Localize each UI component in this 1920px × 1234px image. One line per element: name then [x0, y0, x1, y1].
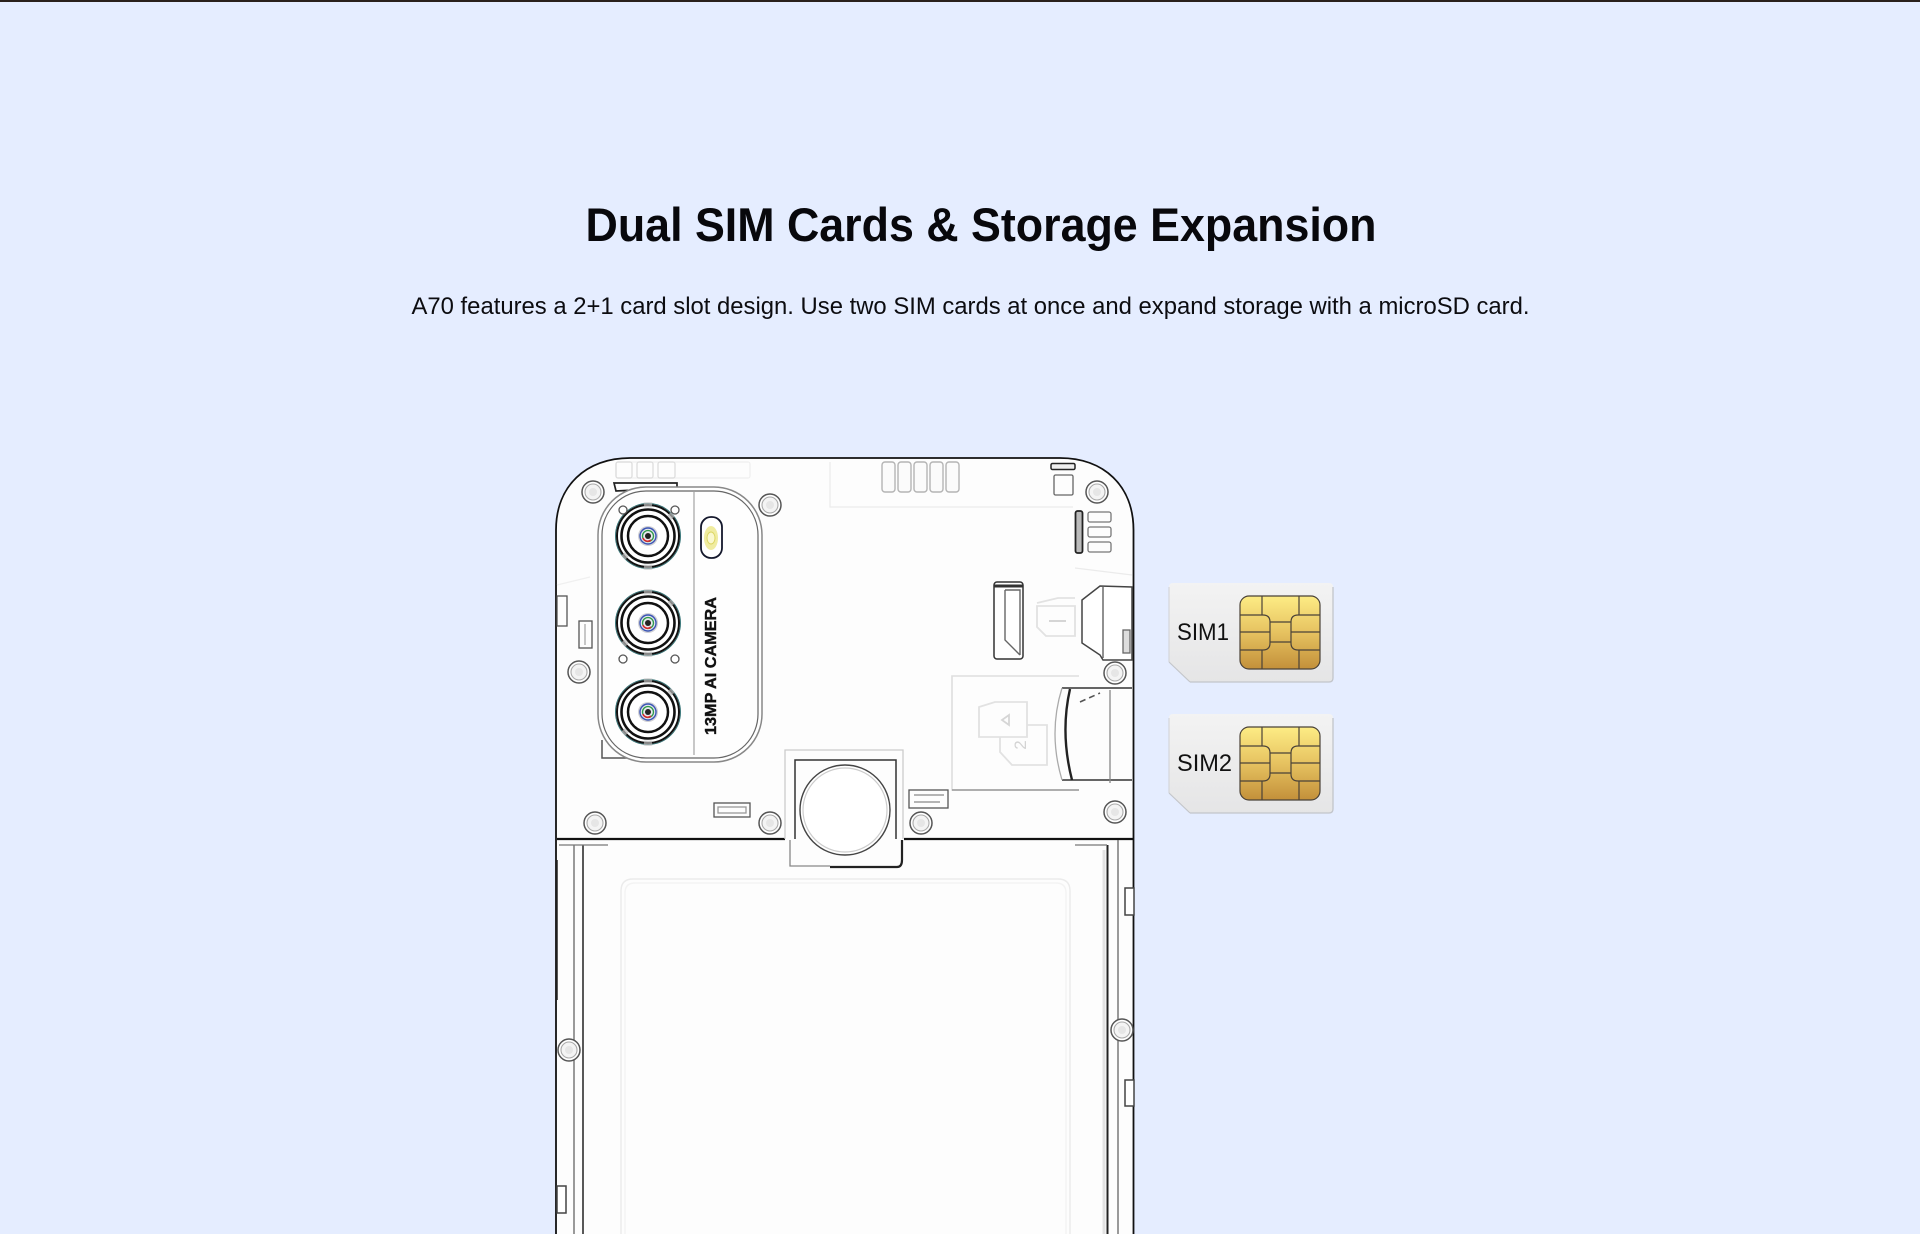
bottom small grille	[714, 803, 750, 817]
SIM1 label: SIM1	[1177, 619, 1229, 646]
side screws on rails	[558, 1019, 1133, 1061]
top vents	[882, 462, 959, 492]
phone body outline	[556, 458, 1134, 1234]
divider line	[557, 838, 1133, 840]
sim 1 tray	[1082, 586, 1132, 660]
screws	[568, 481, 1126, 834]
storage area with icons	[952, 676, 1079, 790]
top faint panel and slots	[557, 462, 1132, 585]
top edge strip	[0, 0, 1920, 2]
side clips	[557, 888, 1134, 1213]
SIM1 card	[1169, 583, 1333, 682]
subtitle: A70 features a 2+1 card slot design. Use two SIM cards at once and expand storage with a microSD card.	[412, 293, 1530, 320]
screw beside sim tray	[1104, 662, 1126, 684]
top right sensor and speaker	[1051, 464, 1111, 553]
SIM2 label: SIM2	[1177, 750, 1232, 777]
camera lens 3	[616, 680, 680, 744]
micro USB style slot	[994, 582, 1023, 659]
dark bar above camera	[614, 483, 677, 491]
side frame rails	[557, 840, 1118, 1234]
camera module	[598, 487, 762, 762]
SIM2 chip	[1240, 727, 1320, 800]
camera lens 1	[616, 504, 680, 568]
sim 2 tray	[1055, 688, 1132, 783]
phone line drawing	[556, 458, 1134, 1234]
fingerprint module	[785, 750, 903, 867]
small holes	[619, 506, 679, 663]
SIM2 card	[1169, 714, 1333, 813]
battery outline	[621, 879, 1070, 1234]
right small grille	[909, 790, 948, 808]
SIM1 chip	[1240, 596, 1320, 669]
title: Dual SIM Cards & Storage Expansion	[586, 198, 1376, 251]
camera lens 2	[616, 590, 680, 656]
flash	[701, 517, 722, 558]
sim 1 slot icon	[1037, 598, 1075, 636]
camera label: 13MP AI CAMERA	[703, 597, 720, 735]
left side clips	[557, 596, 592, 648]
storage area with icons: 2	[1011, 740, 1030, 750]
